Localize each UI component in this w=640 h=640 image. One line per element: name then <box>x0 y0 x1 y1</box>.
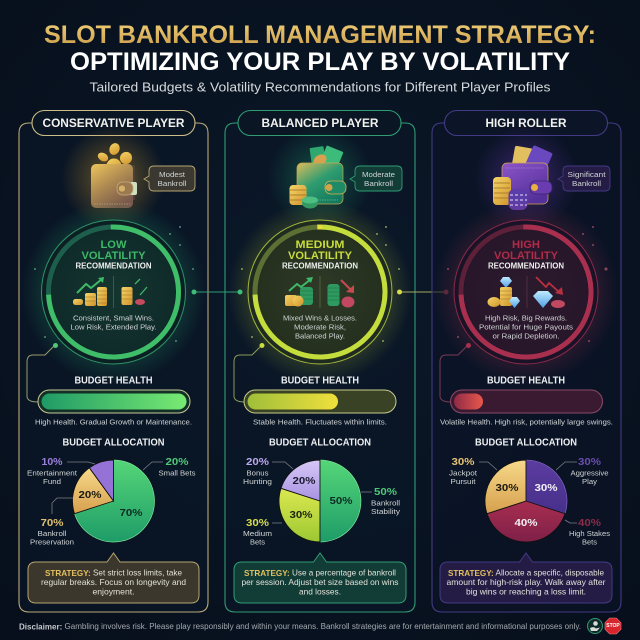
pie label: jackpot pursuit: 30% <box>452 456 475 468</box>
volatility gauge: high: VOLATILITY <box>494 250 559 262</box>
volatility gauge: medium: Mixed Wins & Losses. <box>283 314 357 322</box>
strategy callout: conservative: STRATEGY: Set strict loss limits, take <box>45 568 182 578</box>
node dot <box>53 343 58 348</box>
icon: diamond and falling arrow <box>533 277 565 308</box>
title <box>44 21 596 76</box>
pie label: bankroll preservation: 70% <box>40 517 64 529</box>
strategy callout: balanced: per session. Adjust bet size based on wins <box>242 578 398 587</box>
icon: small stack and arrows <box>122 279 147 305</box>
health bar: stable <box>244 390 396 413</box>
icon: mixed coins up <box>285 277 313 306</box>
node dot <box>260 343 264 348</box>
pie chart: high roller allocation: 40% <box>514 517 538 529</box>
pie label: bankroll stability: Bankroll <box>371 498 400 508</box>
callout: significant bankroll <box>558 166 610 191</box>
callout: moderate bankroll: Bankroll <box>364 179 393 188</box>
pie leader lines <box>52 462 163 514</box>
volatility gauge: low: LOW <box>100 239 127 251</box>
pie label: bankroll preservation <box>30 517 74 546</box>
pie chart: high roller allocation <box>485 460 567 542</box>
pie label: high stakes bets: Bets <box>582 538 597 546</box>
callout: moderate bankroll <box>350 166 402 191</box>
health bar: high <box>38 390 190 413</box>
pie label: aggressive play: 30% <box>578 456 602 468</box>
strategy callout: high roller: STRATEGY: Allocate a specific, disposable <box>448 568 604 578</box>
panel: high roller <box>432 110 621 612</box>
heading pill: conservative <box>32 110 195 136</box>
pie label: jackpot pursuit: Pursuit <box>450 477 476 486</box>
volatility gauge: low: RECOMMENDATION <box>76 262 152 270</box>
callout: significant bankroll: Significant <box>568 170 606 179</box>
pie chart: high roller allocation: 30% <box>534 482 558 494</box>
title: OPTIMIZING YOUR PLAY BY VOLATILITY <box>70 48 570 76</box>
icon: responsible hand <box>588 618 602 634</box>
volatility gauge: high: HIGH <box>512 239 540 251</box>
heading: budget allocation: BUDGET ALLOCATION <box>269 438 371 448</box>
pie chart: conservative allocation: 20% <box>78 489 102 501</box>
heading: budget allocation: BUDGET ALLOCATION <box>475 438 577 448</box>
heading pill: balanced: BALANCED PLAYER <box>262 116 379 130</box>
health bar: volatile <box>450 390 602 413</box>
heading pill: conservative: CONSERVATIVE PLAYER <box>42 116 185 130</box>
volatility gauge: low: Consistent, Small Wins. <box>73 314 154 322</box>
subtitle: Tailored Budgets & Volatility Recommendations for Different Player Profiles <box>90 80 551 94</box>
volatility gauge: high: RECOMMENDATION <box>488 262 564 270</box>
pie label: entertainment fund: Fund <box>43 477 61 486</box>
pie label: bonus hunting: Hunting <box>243 477 272 486</box>
volatility gauge: medium <box>228 200 412 384</box>
pie label: high stakes bets: High Stakes <box>569 529 610 538</box>
volatility gauge: high: High Risk, Big Rewards. <box>485 314 567 322</box>
volatility gauge: medium: Moderate Risk, <box>294 322 346 332</box>
pie label: aggressive play: Aggressive <box>570 468 608 478</box>
strategy callout: conservative <box>28 553 199 603</box>
panel frame: conservative <box>19 123 208 612</box>
disclaimer: Disclaimer: Gambling involves risk. Please play responsibly and within your means. Bankroll strategies are for entertainment and informational purposes only. <box>19 622 581 631</box>
pie leader lines <box>479 462 577 523</box>
icon: significant wallet <box>474 126 578 230</box>
strategy callout: high roller: big wins or reaching a loss limit. <box>466 588 586 596</box>
connector: low to medium <box>192 290 242 294</box>
title: SLOT BANKROLL MANAGEMENT STRATEGY: <box>44 21 596 49</box>
health caption: Stable Health. Fluctuates within limits. <box>253 418 387 426</box>
pie label: small bets: Small Bets <box>158 468 196 478</box>
pie label: jackpot pursuit: Jackpot <box>449 468 478 478</box>
pie chart: balanced allocation: 50% <box>330 495 353 507</box>
strategy callout: high roller <box>440 553 612 603</box>
callout: modest bankroll <box>144 166 195 191</box>
icon: stop sign: STOP <box>606 623 620 629</box>
pie label: entertainment fund: Entertainment <box>27 468 78 478</box>
volatility gauge: medium: Balanced Play. <box>295 332 345 340</box>
pie label: medium bets: 30% <box>246 517 270 529</box>
panel: balanced player <box>225 110 415 612</box>
icon: mixed chips down <box>328 280 354 308</box>
pie label: bonus hunting <box>243 456 272 486</box>
connector: gauge to budget health <box>234 345 262 402</box>
icon: moderate wallet <box>268 126 372 230</box>
heading: budget health: BUDGET HEALTH <box>487 376 565 386</box>
pie leader lines <box>272 462 372 523</box>
strategy callout: conservative: enjoyment. <box>92 588 134 596</box>
connector: medium to high <box>397 290 448 294</box>
pie label: bankroll preservation: Preservation <box>30 538 74 546</box>
heading: budget health: BUDGET HEALTH <box>281 376 359 386</box>
pie label: bankroll preservation: Bankroll <box>38 529 67 538</box>
pie label: jackpot pursuit <box>449 456 478 486</box>
pie chart: conservative allocation: 70% <box>120 507 143 519</box>
pie label: entertainment fund <box>27 456 78 486</box>
volatility gauge: low <box>22 200 206 384</box>
connector: gauge to budget health <box>27 345 55 402</box>
volatility gauge: high <box>434 200 618 384</box>
pie label: medium bets: Bets <box>250 538 265 546</box>
callout: modest bankroll: Bankroll <box>158 179 187 188</box>
strategy callout: high roller: amount for high-risk play. Walk away after <box>446 578 606 587</box>
heading pill: high roller <box>444 110 608 136</box>
health caption: Volatile Health. High risk, potentially large swings. <box>440 418 613 426</box>
icon: diamonds and coins <box>488 277 520 308</box>
volatility gauge: high: Potential for Huge Payouts <box>479 322 573 332</box>
callout: moderate bankroll: Moderate <box>362 170 395 179</box>
heading: budget health: BUDGET HEALTH <box>74 376 152 386</box>
icon: modest wallet <box>61 126 165 230</box>
panel: conservative player <box>19 110 208 612</box>
callout: modest bankroll: Modest <box>159 170 186 179</box>
volatility gauge: medium: RECOMMENDATION <box>282 262 358 270</box>
pie label: high stakes bets <box>569 517 610 546</box>
icon: growing coins <box>73 277 107 306</box>
pie chart: balanced allocation: 20% <box>292 475 316 487</box>
pie label: bonus hunting: Bonus <box>246 468 269 478</box>
pie chart: conservative allocation <box>72 460 154 542</box>
pie chart: balanced allocation <box>279 460 361 542</box>
strategy callout: balanced: STRATEGY: Use a percentage of bankroll <box>244 568 396 578</box>
pie chart: balanced allocation: 30% <box>290 509 313 521</box>
heading pill: high roller: HIGH ROLLER <box>486 116 567 130</box>
pie label: medium bets <box>243 517 272 546</box>
pie label: bonus hunting: 20% <box>246 456 270 468</box>
callout: significant bankroll: Bankroll <box>572 179 601 188</box>
pie label: aggressive play: Play <box>582 477 597 486</box>
connector: gauge to budget health <box>440 345 468 402</box>
pie label: bankroll stability: 50% <box>374 486 398 498</box>
pie label: small bets: 20% <box>166 456 189 468</box>
pie label: bankroll stability <box>371 486 400 516</box>
health caption: High Health. Gradual Growth or Maintenance. <box>35 418 192 426</box>
pie label: bankroll stability: Stability <box>371 507 400 516</box>
strategy callout: balanced <box>234 553 406 603</box>
panel frame: balanced <box>225 123 415 612</box>
strategy callout: balanced: and losses. <box>299 588 341 596</box>
pie chart: high roller allocation: 30% <box>496 482 519 494</box>
pie label: small bets <box>158 456 196 478</box>
volatility gauge: medium: MEDIUM <box>296 239 344 251</box>
volatility gauge: low: Low Risk, Extended Play. <box>70 322 156 332</box>
heading pill: balanced <box>238 110 401 136</box>
volatility gauge: high: or Rapid Depletion. <box>492 332 560 340</box>
pie label: aggressive play <box>570 456 608 486</box>
pie label: medium bets: Medium <box>243 529 272 538</box>
pie label: entertainment fund: 10% <box>42 456 63 468</box>
strategy callout: conservative: regular breaks. Focus on longevity and <box>41 578 186 587</box>
heading: budget allocation: BUDGET ALLOCATION <box>62 438 164 448</box>
volatility gauge: medium: VOLATILITY <box>288 250 353 262</box>
pie label: high stakes bets: 40% <box>578 517 602 529</box>
volatility gauge: low: VOLATILITY <box>82 250 146 262</box>
panel frame: high roller <box>432 123 621 612</box>
node dot <box>466 343 471 348</box>
icon: stop sign <box>605 618 621 634</box>
